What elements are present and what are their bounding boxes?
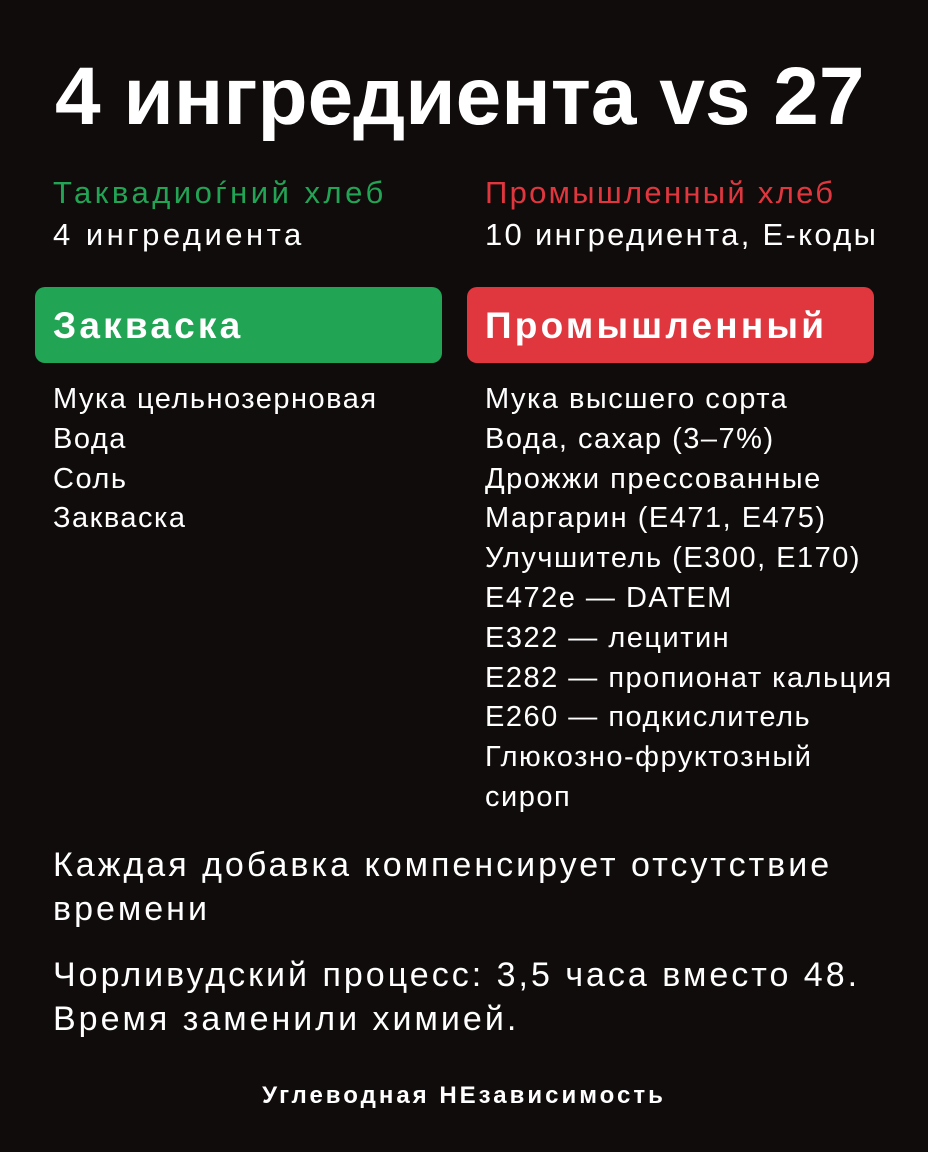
right subheading: Промышленный хлеб: [485, 175, 835, 210]
left subheading: [53, 175, 387, 252]
left list: Мука цельнозерновая: [53, 383, 378, 415]
right list: E282 — пропионат кальция: [485, 662, 893, 694]
right subheading: 10 ингредиента, E-коды: [485, 217, 878, 252]
footer: Углеводная НЕзависимость: [262, 1082, 666, 1109]
right subheading: [485, 175, 878, 252]
paragraph 1: Каждая добавка компенсирует отсутствие: [53, 846, 832, 884]
right list: E472e — DATEM: [485, 582, 733, 614]
right list: E322 — лецитин: [485, 622, 730, 654]
green box: Закваска: Закваска: [53, 305, 243, 346]
right list: Вода, сахар (3–7%): [485, 423, 775, 455]
paragraph 1: [53, 846, 832, 928]
left list: Вода: [53, 423, 127, 455]
right list: Мука высшего сорта: [485, 383, 788, 415]
title: 4 ингредиента vs 27: [55, 51, 865, 142]
red box: Промышленный: [467, 287, 874, 363]
paragraph 2: [53, 956, 860, 1038]
right list: Улучшитель (E300, E170): [485, 542, 861, 574]
right list: сироп: [485, 781, 571, 813]
right list: [485, 383, 893, 813]
red box: Промышленный: Промышленный: [485, 305, 827, 346]
paragraph 2: Чорливудский процесс: 3,5 часа вместо 48.: [53, 956, 860, 994]
left list: [53, 383, 378, 534]
right list: Маргарин (E471, E475): [485, 502, 827, 534]
green box: Закваска: [35, 287, 442, 363]
right list: Дрожжи прессованные: [485, 463, 822, 495]
right list: Глюкозно-фруктозный: [485, 741, 812, 773]
left subheading: Таквадиоѓний хлеб: [53, 175, 387, 210]
paragraph 2: Время заменили химией.: [53, 1000, 519, 1038]
paragraph 1: времени: [53, 890, 210, 928]
right list: E260 — подкислитель: [485, 701, 811, 733]
left list: Закваска: [53, 502, 186, 534]
left list: Соль: [53, 463, 127, 495]
left subheading: 4 ингредиента: [53, 217, 305, 252]
